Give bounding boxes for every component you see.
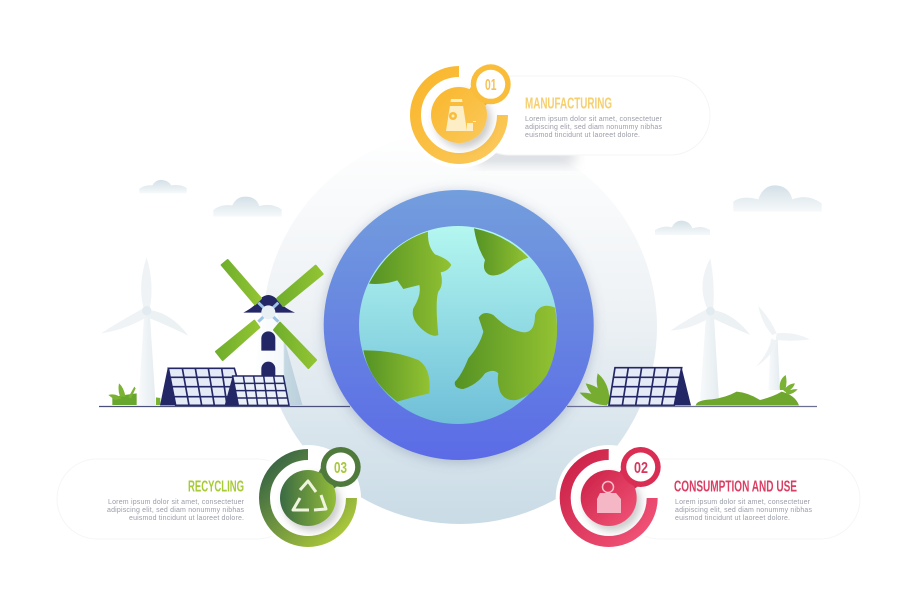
badge halo: [406, 62, 512, 168]
cloud: left large: [213, 197, 282, 217]
windmill blades: [216, 260, 323, 368]
badge ring: [565, 454, 652, 542]
badge neck: [618, 459, 648, 490]
small bush: [108, 383, 160, 405]
globe outer ring: [324, 190, 594, 460]
description: Lorem ipsum dolor sit amet, consectetuer: [675, 499, 811, 506]
number circle: [321, 447, 361, 487]
wind turbine small: [756, 306, 810, 390]
globe ocean: [359, 226, 557, 424]
description: euismod tincidunt ut laoreet dolore.: [525, 132, 640, 139]
globe: [324, 190, 594, 460]
green hill: [696, 392, 799, 405]
badge halo: [556, 445, 662, 551]
leaf plant: [580, 373, 610, 405]
card: [620, 459, 860, 539]
panel shadow: [475, 150, 575, 164]
card: [470, 76, 710, 155]
card: [57, 459, 297, 539]
badge ring: [416, 72, 502, 158]
number: 01: [485, 77, 497, 94]
continent: australasia: [455, 306, 557, 400]
number circle: [471, 64, 511, 104]
windmill roof: [243, 295, 295, 313]
icon: factory: [446, 99, 476, 131]
description: Lorem ipsum dolor sit amet, consectetuer: [525, 116, 663, 123]
cloud: left small: [139, 180, 187, 193]
badge halo: [255, 445, 361, 551]
cloud: right large: [733, 185, 822, 212]
badge ring: [264, 454, 352, 542]
background circle: [263, 130, 657, 524]
title: RECYCLING: [188, 478, 244, 496]
panel: recycling: [57, 445, 361, 551]
wind turbine: [101, 257, 188, 405]
solar panel: [609, 368, 691, 405]
cloud: right small: [655, 221, 710, 235]
description: euismod tincidunt ut laoreet dolore.: [129, 515, 244, 522]
continent: south: [363, 350, 430, 402]
icon: recycle: [293, 481, 326, 510]
panel: manufacturing: [406, 62, 710, 168]
ground line right: [567, 406, 817, 408]
left landscape scene: [101, 180, 323, 405]
badge disc: [581, 470, 637, 526]
description: adipiscing elit, sed diam nonummy nibhas: [675, 507, 812, 514]
windmill hub: [258, 303, 278, 322]
right landscape scene: [580, 185, 822, 405]
title: MANUFACTURING: [525, 96, 612, 112]
windmill tower: [252, 312, 302, 405]
description: adipiscing elit, sed diam nonummy nibhas: [525, 124, 662, 131]
description: euismod tincidunt ut laoreet dolore.: [675, 515, 790, 522]
continent: north america: [369, 232, 451, 336]
number: 02: [634, 460, 648, 477]
continent: arctic: [474, 228, 528, 275]
description: adipiscing elit, sed diam nonummy nibhas: [107, 507, 244, 514]
wind turbine large: [670, 258, 750, 400]
description: Lorem ipsum dolor sit amet, consectetuer: [108, 499, 245, 506]
icon: person: [597, 482, 621, 513]
ground line left: [99, 406, 350, 408]
number: 03: [334, 460, 347, 477]
solar panel large: [160, 368, 245, 405]
globe continents: [363, 228, 557, 402]
badge disc: [431, 87, 487, 143]
windmill windows: [261, 331, 275, 377]
panel: consumption and use: [556, 445, 860, 551]
badge neck: [468, 76, 498, 107]
badge disc: [280, 470, 336, 526]
hill plant: [780, 375, 798, 395]
solar panel small: [225, 376, 289, 405]
number circle: [621, 447, 661, 487]
badge neck: [317, 459, 347, 490]
title: CONSUMPTION AND USE: [674, 478, 797, 496]
